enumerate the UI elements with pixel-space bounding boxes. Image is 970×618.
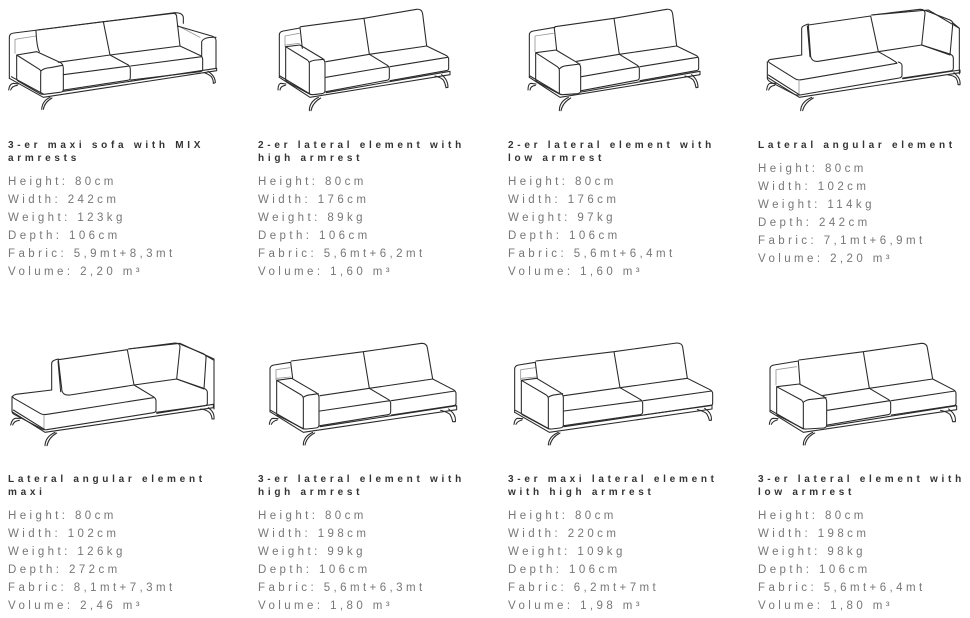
spec block: 3-er lateral element with low armrest: low armrest <box>758 487 855 498</box>
sofa illustration: 3-er lateral element with low armrest <box>768 342 958 446</box>
spec block: 2-er lateral element with high armrest: Fabric: 5,6mt+6,2mt <box>258 248 426 260</box>
spec block: 3-er maxi sofa with MIX armrests: Weight: 123kg <box>8 212 126 224</box>
spec block: 3-er maxi lateral element with high armrest: 3-er maxi lateral element <box>508 474 718 485</box>
spec block: lateral angular element maxi: Fabric: 8,1mt+7,3mt <box>8 582 176 594</box>
spec block: 3-er maxi sofa with MIX armrests: armrests <box>8 153 80 164</box>
sofa illustration: 2-er lateral element with high armrest <box>278 8 451 112</box>
spec block: lateral angular element <box>758 140 956 265</box>
spec block: 3-er lateral element with high armrest: high armrest <box>258 487 363 498</box>
spec block: 2-er lateral element with low armrest: low armrest <box>508 153 605 164</box>
spec block: 2-er lateral element with high armrest: high armrest <box>258 153 363 164</box>
sofa illustration: lateral angular element maxi <box>10 342 215 446</box>
spec block: 3-er maxi lateral element with high armrest: Height: 80cm <box>508 510 617 522</box>
spec block: 2-er lateral element with low armrest <box>508 140 715 278</box>
spec block: 3-er maxi lateral element with high armrest: Volume: 1,98 m³ <box>508 600 643 612</box>
sofa illustration: 2-er lateral element with low armrest <box>528 8 701 112</box>
spec block: 3-er lateral element with high armrest: Fabric: 5,6mt+6,3mt <box>258 582 426 594</box>
spec block: 3-er maxi lateral element with high armrest <box>508 474 718 612</box>
sofa illustration: 3-er lateral element with high armrest <box>268 342 458 446</box>
spec block: 3-er lateral element with low armrest: Depth: 106cm <box>758 564 871 576</box>
spec block: 3-er lateral element with low armrest: 3-er lateral element with <box>758 474 965 485</box>
spec block: 3-er lateral element with high armrest: Weight: 99kg <box>258 546 366 558</box>
spec block: 3-er maxi sofa with MIX armrests: Width: 242cm <box>8 194 119 206</box>
spec block: 2-er lateral element with high armrest: 2-er lateral element with <box>258 140 465 151</box>
spec block: 2-er lateral element with low armrest: Fabric: 5,6mt+6,4mt <box>508 248 676 260</box>
spec block: 3-er maxi lateral element with high armrest: with high armrest <box>508 487 655 498</box>
spec block: lateral angular element maxi: Height: 80cm <box>8 510 117 522</box>
spec block: 3-er maxi sofa with MIX armrests: Height: 80cm <box>8 176 117 188</box>
spec block: 3-er lateral element with low armrest: Fabric: 5,6mt+6,4mt <box>758 582 926 594</box>
spec block: lateral angular element: Height: 80cm <box>758 163 867 175</box>
spec block: lateral angular element: Depth: 242cm <box>758 217 871 229</box>
spec block: lateral angular element maxi <box>8 474 206 612</box>
spec block: lateral angular element: Fabric: 7,1mt+6,9mt <box>758 235 926 247</box>
sofa illustration: 3-er maxi sofa with MIX armrests <box>8 12 218 110</box>
spec block: 3-er lateral element with high armrest: 3-er lateral element with <box>258 474 465 485</box>
spec block: 3-er lateral element with low armrest <box>758 474 965 612</box>
spec block: 2-er lateral element with high armrest: Volume: 1,60 m³ <box>258 266 393 278</box>
spec block: 3-er lateral element with low armrest: Height: 80cm <box>758 510 867 522</box>
spec block: lateral angular element maxi: Lateral angular element <box>8 474 206 485</box>
spec block: lateral angular element: Weight: 114kg <box>758 199 875 211</box>
spec block: 2-er lateral element with high armrest: Weight: 89kg <box>258 212 366 224</box>
spec block: 3-er lateral element with high armrest: Height: 80cm <box>258 510 367 522</box>
spec block: 2-er lateral element with high armrest <box>258 140 465 278</box>
spec block: 3-er lateral element with low armrest: Weight: 98kg <box>758 546 866 558</box>
spec block: 3-er maxi sofa with MIX armrests <box>8 140 204 278</box>
spec block: 3-er maxi sofa with MIX armrests: 3-er maxi sofa with MIX <box>8 140 204 151</box>
spec block: 3-er lateral element with low armrest: Width: 198cm <box>758 528 869 540</box>
spec block: 3-er maxi sofa with MIX armrests: Fabric: 5,9mt+8,3mt <box>8 248 176 260</box>
spec block: lateral angular element maxi: Volume: 2,46 m³ <box>8 600 143 612</box>
spec block: lateral angular element maxi: Weight: 126kg <box>8 546 126 558</box>
spec block: lateral angular element: Width: 102cm <box>758 181 869 193</box>
spec block: lateral angular element: Volume: 2,20 m³ <box>758 253 893 265</box>
spec block: 3-er lateral element with high armrest: Width: 198cm <box>258 528 369 540</box>
spec block: 3-er maxi lateral element with high armrest: Fabric: 6,2mt+7mt <box>508 582 659 594</box>
spec block: 3-er maxi lateral element with high armrest: Depth: 106cm <box>508 564 621 576</box>
spec block: 3-er maxi sofa with MIX armrests: Depth: 106cm <box>8 230 121 242</box>
spec block: lateral angular element maxi: Width: 102cm <box>8 528 119 540</box>
spec block: 2-er lateral element with low armrest: Weight: 97kg <box>508 212 616 224</box>
spec block: 2-er lateral element with high armrest: Height: 80cm <box>258 176 367 188</box>
sofa illustration: lateral angular element <box>766 8 961 112</box>
spec block: 2-er lateral element with low armrest: 2-er lateral element with <box>508 140 715 151</box>
spec block: lateral angular element maxi: Depth: 272cm <box>8 564 121 576</box>
spec block: 3-er lateral element with low armrest: Volume: 1,80 m³ <box>758 600 893 612</box>
spec block: 2-er lateral element with low armrest: Width: 176cm <box>508 194 619 206</box>
spec block: 2-er lateral element with high armrest: Width: 176cm <box>258 194 369 206</box>
spec block: 3-er maxi sofa with MIX armrests: Volume: 2,20 m³ <box>8 266 143 278</box>
spec block: lateral angular element: Lateral angular element <box>758 140 956 151</box>
sofa illustration: 3-er maxi lateral element with high armrest <box>514 342 714 446</box>
spec block: 3-er lateral element with high armrest: Volume: 1,80 m³ <box>258 600 393 612</box>
spec block: 3-er maxi lateral element with high armrest: Width: 220cm <box>508 528 619 540</box>
spec block: 2-er lateral element with low armrest: Volume: 1,60 m³ <box>508 266 643 278</box>
spec block: 3-er maxi lateral element with high armrest: Weight: 109kg <box>508 546 626 558</box>
spec block: 2-er lateral element with low armrest: Height: 80cm <box>508 176 617 188</box>
spec block: 3-er lateral element with high armrest: Depth: 106cm <box>258 564 371 576</box>
spec block: 3-er lateral element with high armrest <box>258 474 465 612</box>
spec block: lateral angular element maxi: maxi <box>8 487 46 498</box>
spec block: 2-er lateral element with high armrest: Depth: 106cm <box>258 230 371 242</box>
spec block: 2-er lateral element with low armrest: Depth: 106cm <box>508 230 621 242</box>
